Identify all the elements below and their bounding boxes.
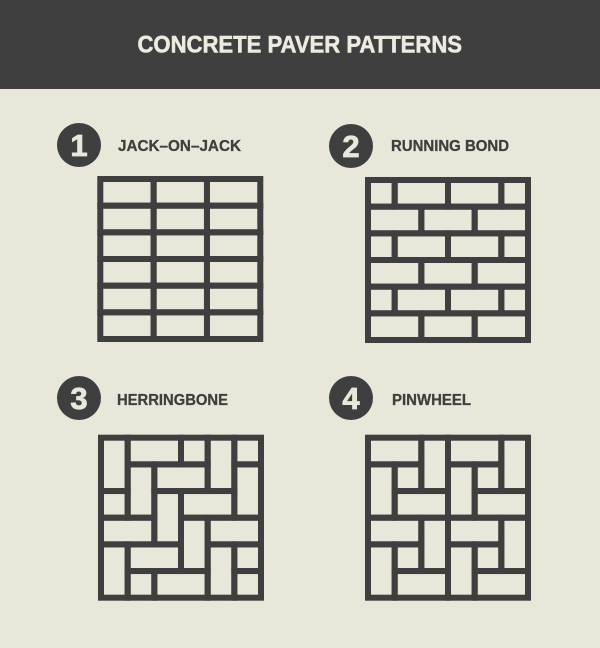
heading: herringbone: HERRINGBONE: [117, 392, 228, 409]
number badge 3: [57, 376, 101, 420]
number badge 1: 1: [70, 128, 88, 163]
panel: pinwheel: [329, 376, 528, 598]
panel: running bond: [329, 124, 528, 340]
number badge 2: [329, 124, 373, 168]
heading: pinwheel: PINWHEEL: [392, 392, 471, 409]
number badge 1: [57, 123, 101, 167]
number badge 3: 3: [70, 381, 88, 416]
pattern: pinwheel grid: [368, 438, 528, 598]
number badge 4: 4: [342, 381, 360, 416]
heading: jack-on-jack: JACK–ON–JACK: [118, 138, 241, 155]
title: CONCRETE PAVER PATTERNS: [138, 32, 462, 58]
header band: [0, 0, 600, 89]
panel: jack-on-jack: [57, 123, 260, 339]
pattern: running bond grid: [368, 180, 528, 340]
heading: running bond: RUNNING BOND: [391, 138, 509, 155]
number badge 4: [329, 376, 373, 420]
pattern: herringbone grid: [101, 438, 261, 598]
pattern: jack-on-jack grid: [100, 179, 260, 339]
number badge 2: 2: [342, 129, 360, 164]
panel: herringbone: [57, 376, 261, 598]
